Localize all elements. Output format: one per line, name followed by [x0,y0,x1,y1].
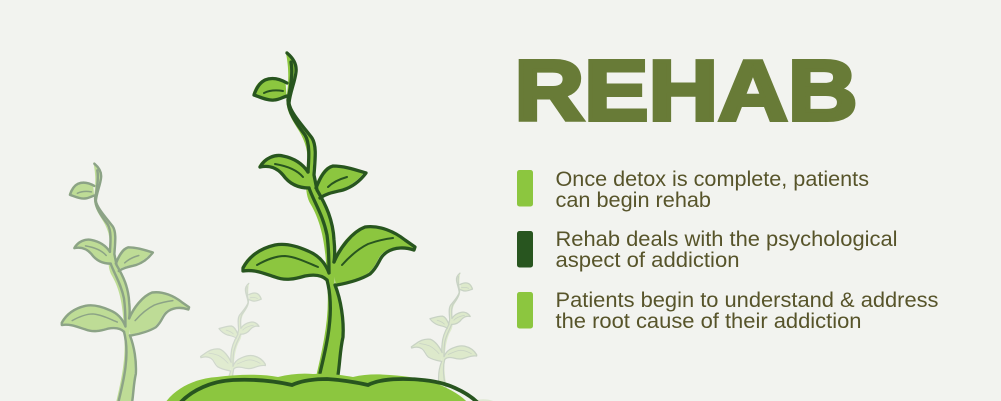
bullet 3 [517,289,938,333]
bullet 2 [517,228,898,272]
bullet 3 text: the root cause of their addiction [556,310,862,333]
faint plant left [201,283,266,401]
bullet 3 text: Patients begin to understand & address [556,289,938,312]
bullet 1 [517,168,869,212]
bullet 2 text: Rehab deals with the psychological [556,228,898,251]
bullet 1 text: Once detox is complete, patients [556,168,869,191]
title: REHAB [514,44,858,139]
faint plant right [411,272,477,397]
main plant [242,51,415,379]
medium plant left [61,162,189,401]
bullet marker dark green [517,231,533,268]
bullet 2 text: aspect of addiction [556,249,740,272]
bullet marker light green [517,292,533,328]
ground mound [165,374,498,401]
bullet 1 text: can begin rehab [556,189,711,212]
bullet marker light green [517,170,533,206]
pale mound edge [470,399,498,401]
